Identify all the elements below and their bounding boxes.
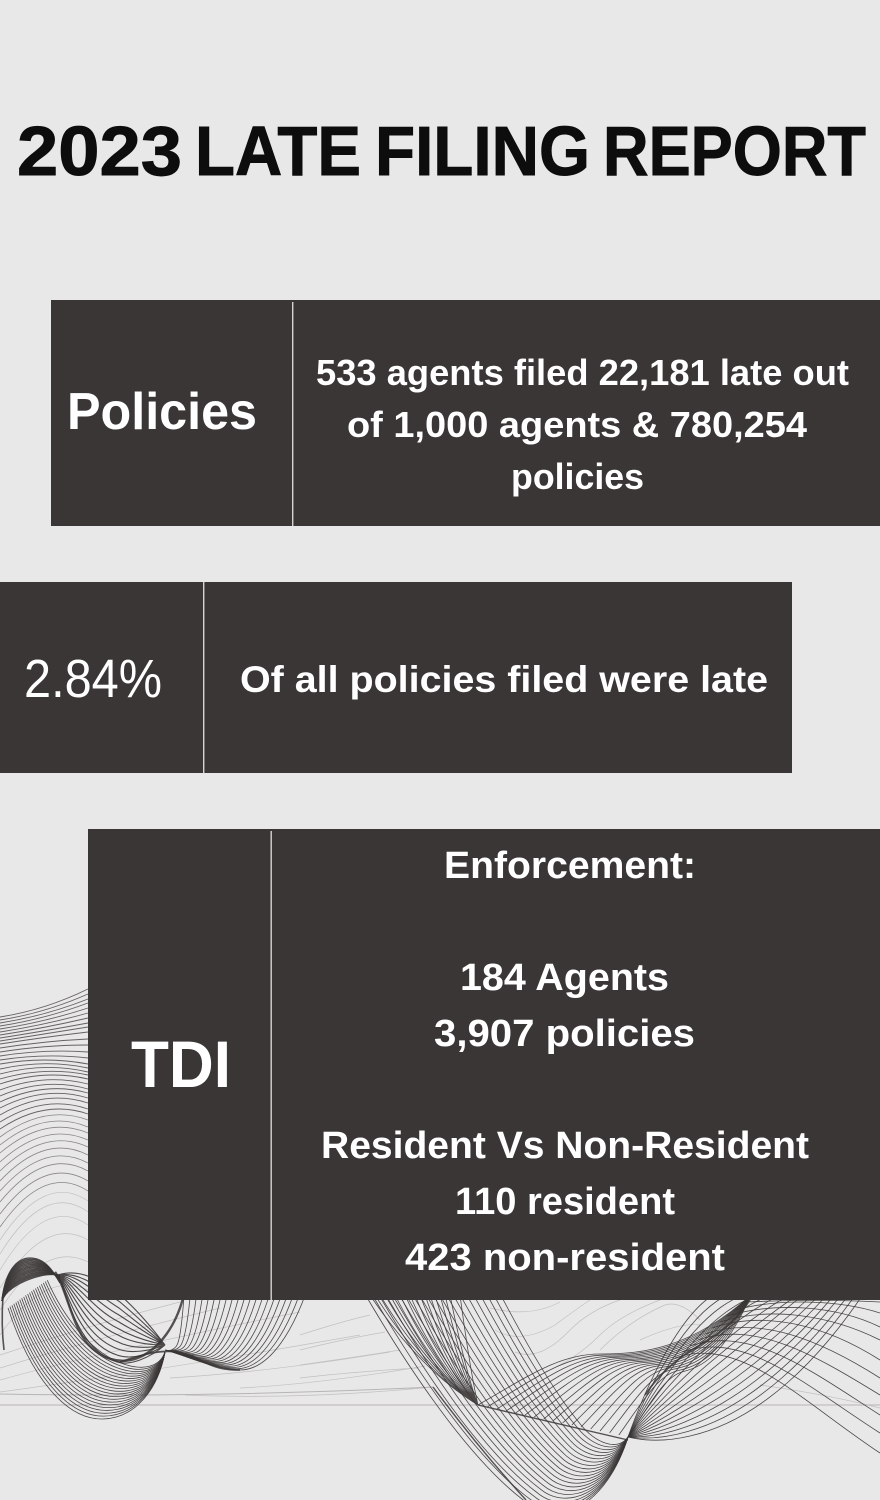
policies description [316,352,849,497]
panel: TDI enforcement [88,829,880,1300]
right rising ribbon [478,1295,751,1437]
percentage description: Of all policies filed were late [240,659,768,700]
resident vs non-resident figures: 423 non-resident [405,1237,725,1279]
left top cap [2,1258,60,1301]
panel: policies [51,300,880,526]
right lower bowl [164,1300,304,1370]
percentage figure: 2.84% [24,649,162,709]
resident vs non-resident figures: Resident Vs Non-Resident [321,1125,809,1167]
right large bowl [368,1300,628,1500]
decorative wave line artwork [0,989,880,1500]
enforcement figures: 3,907 policies [434,1013,695,1055]
enforcement figures: 184 Agents [460,957,669,999]
title: 2023 [17,112,182,190]
TDI label: TDI [131,1027,231,1101]
policies description: of 1,000 agents & 780,254 [347,404,807,445]
enforcement heading: Enforcement: [444,845,696,887]
enforcement figures [434,957,695,1055]
title [17,112,866,190]
resident vs non-resident figures: 110 resident [455,1181,675,1223]
title: LATE [195,112,361,190]
left lower bowl [8,1280,165,1419]
policies label: Policies [67,383,257,441]
policies description: 533 agents filed 22,181 late out [316,352,849,393]
resident vs non-resident figures [321,1125,809,1279]
policies description: policies [511,456,644,497]
right outer sweep [628,1300,860,1441]
panel: late percentage [0,582,792,773]
title: FILING [375,112,590,190]
